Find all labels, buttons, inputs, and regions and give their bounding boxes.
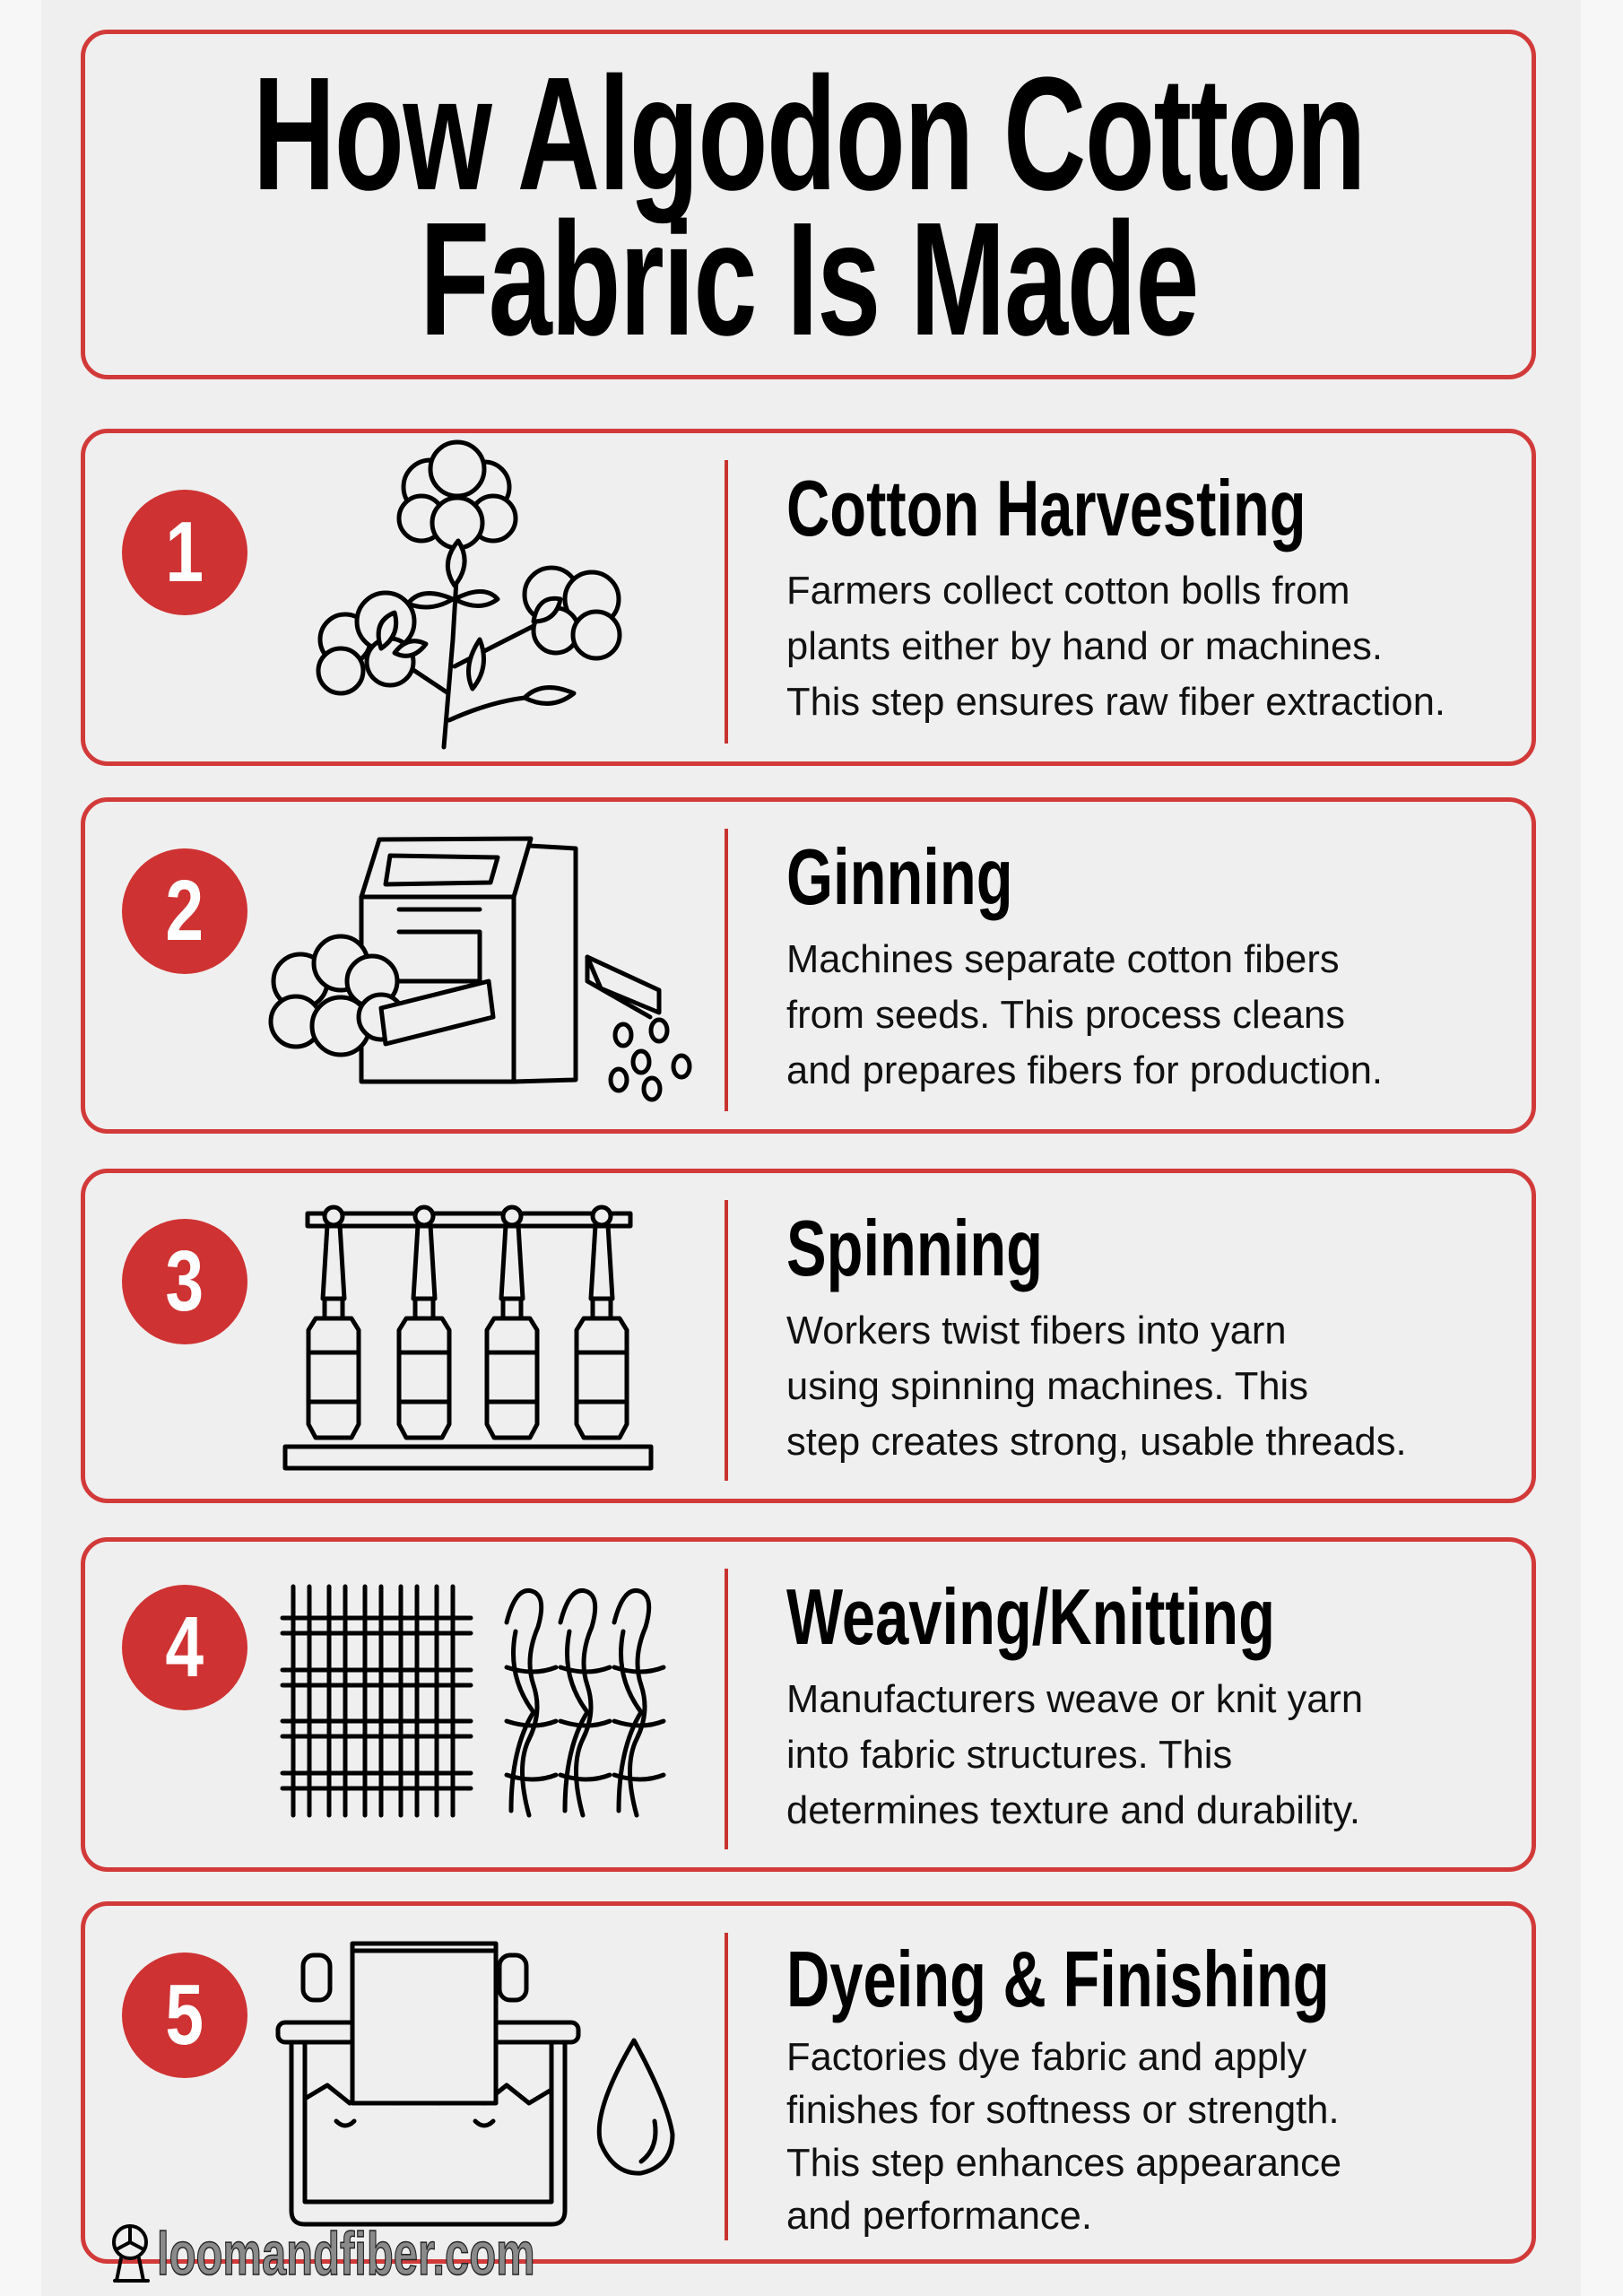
text xyxy=(786,2036,1341,2238)
text: plants either by hand or machines. xyxy=(786,625,1383,668)
heading: Ginning xyxy=(786,832,1013,921)
text: Factories dye fabric and apply xyxy=(786,2036,1306,2079)
panel: step 5 dyeing & finishing xyxy=(81,1901,1536,2264)
text: Workers twist fibers into yarn xyxy=(786,1309,1287,1352)
text: finishes for softness or strength. xyxy=(786,2089,1340,2132)
text xyxy=(786,1678,1363,1832)
number badge 4: 4 xyxy=(166,1599,204,1695)
icon: dye vat and drop xyxy=(276,1941,674,2226)
text: This step enhances appearance xyxy=(786,2142,1341,2185)
title xyxy=(252,44,1365,370)
text: Farmers collect cotton bolls from xyxy=(786,570,1350,613)
icon: weave and knit xyxy=(280,1584,665,1817)
number badge 5: 5 xyxy=(166,1967,204,2063)
heading: Weaving/Knitting xyxy=(786,1572,1275,1661)
text: determines texture and durability. xyxy=(786,1789,1360,1832)
text: using spinning machines. This xyxy=(786,1365,1308,1408)
title: Fabric Is Made xyxy=(420,189,1197,370)
text: and prepares fibers for production. xyxy=(786,1049,1383,1092)
number badge 2 xyxy=(122,848,247,974)
watermark: loomandfiber.com: loomandfiber.com xyxy=(157,2220,535,2288)
text xyxy=(786,1309,1407,1464)
text: from seeds. This process cleans xyxy=(786,994,1345,1037)
number badge 1 xyxy=(122,490,247,615)
text: This step ensures raw fiber extraction. xyxy=(786,681,1445,724)
number badge 1: 1 xyxy=(166,504,204,600)
heading: Spinning xyxy=(786,1204,1043,1292)
number badge 3 xyxy=(122,1219,247,1344)
panel: step 1 cotton harvesting xyxy=(81,429,1536,766)
text: Manufacturers weave or knit yarn xyxy=(786,1678,1363,1721)
heading: Cotton Harvesting xyxy=(786,464,1306,552)
title box xyxy=(81,30,1536,379)
icon: cotton plant xyxy=(316,439,622,750)
number badge 2: 2 xyxy=(166,863,204,959)
text: and performance. xyxy=(786,2195,1092,2238)
icon: spinning frame xyxy=(283,1205,653,1471)
panel: step 2 ginning xyxy=(81,797,1536,1134)
text: step creates strong, usable threads. xyxy=(786,1421,1407,1464)
text: into fabric structures. This xyxy=(786,1734,1232,1777)
text xyxy=(786,938,1383,1092)
text: Machines separate cotton fibers xyxy=(786,938,1340,981)
title: How Algodon Cotton xyxy=(252,44,1365,224)
text xyxy=(786,570,1445,724)
heading: Dyeing & Finishing xyxy=(786,1935,1330,2023)
number badge 3: 3 xyxy=(166,1233,204,1329)
number badge 4 xyxy=(122,1585,247,1710)
icon: ginning machine xyxy=(269,836,692,1101)
icon: spinning wheel xyxy=(112,2224,150,2283)
panel: step 4 weaving/knitting xyxy=(81,1537,1536,1872)
number badge 5 xyxy=(122,1952,247,2078)
panel: step 3 spinning xyxy=(81,1169,1536,1503)
